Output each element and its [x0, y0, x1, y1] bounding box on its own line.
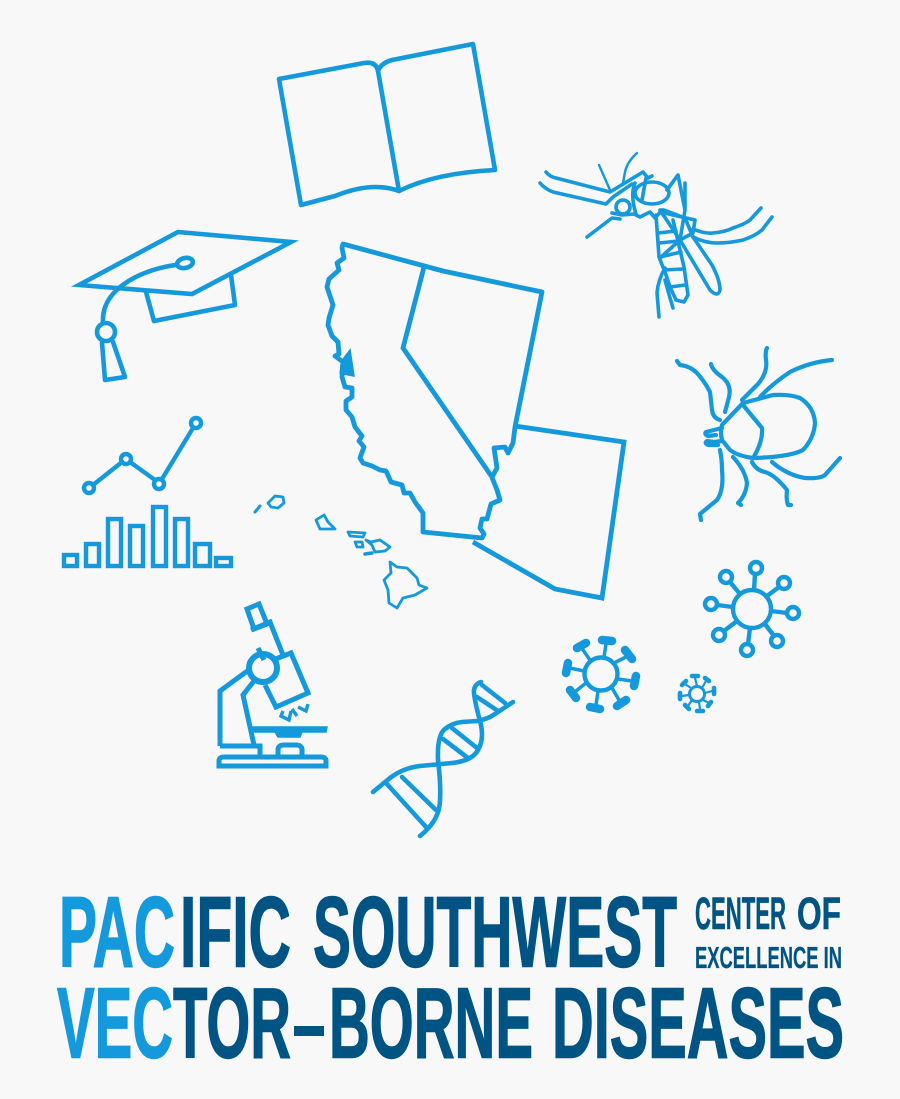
icon: virus with blob spikes: [566, 640, 636, 709]
subtitle: Center of Excellence in: OF: [797, 888, 841, 939]
icon: microscope: [219, 604, 327, 766]
map: Hawaii islands: [255, 496, 427, 608]
title line 2: VEC: [57, 968, 173, 1080]
chart: line graph and bars: [64, 418, 231, 566]
icon: open book: [279, 44, 495, 205]
title line 2: BORNE: [329, 968, 533, 1080]
title line 2: [57, 968, 844, 1080]
Bay Area inlet: [342, 354, 352, 374]
icon: DNA helix: [373, 682, 513, 836]
icon: graduation cap: [79, 232, 291, 380]
icon: small virus: [680, 676, 714, 711]
icon: tick: [677, 348, 840, 520]
title: Pacific Southwest Center of Excellence in Vector-Borne Diseases: [57, 876, 844, 1080]
Nevada western border: [403, 267, 492, 477]
title line 2: TOR: [173, 968, 291, 1080]
map: California, Nevada and Arizona: [327, 244, 624, 598]
title line 1: PAC: [59, 876, 175, 988]
Arizona outline: [473, 426, 624, 598]
subtitle: Center of Excellence in: [695, 888, 842, 975]
icon: mosquito: [540, 153, 772, 317]
California and Nevada outline: [327, 244, 542, 538]
line graph: [84, 418, 201, 493]
subtitle: Center of Excellence in: CENTER: [695, 888, 786, 939]
bar chart: [64, 507, 231, 566]
icon: virus with ringed spikes: [705, 562, 799, 656]
title line 1: IFIC: [180, 876, 291, 988]
title line 1: [59, 876, 677, 988]
